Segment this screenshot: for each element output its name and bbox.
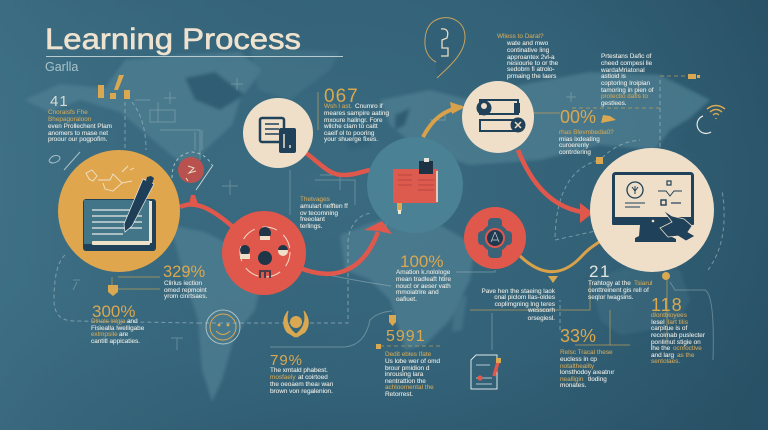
stat: 33%: Relsc Tracal these (560, 349, 613, 356)
icon: smiley (206, 310, 240, 344)
stat: 21: centtreinent gis rell of (588, 287, 649, 294)
stat: 41: proour our pogpofim. (48, 136, 108, 143)
text: Thetvages: Thetvages (300, 196, 330, 203)
stat: 00%: 00% (560, 107, 596, 127)
stat: 5391: nentrattion the (385, 378, 426, 385)
stat: 33%: lonsthodoy aıeatnır (560, 369, 615, 376)
stat: 118: ponlimut stigie on (651, 339, 701, 346)
stat: 118: lhe the (651, 345, 671, 352)
text: Pave hen the: cnal piclom llas-oldes (494, 294, 555, 301)
stat: 21: seqlor lwagsins. (588, 294, 634, 301)
icon: key line (64, 152, 80, 170)
stat: 33%: notaltheality (560, 363, 595, 370)
stat: 118: sentolaes. (651, 358, 680, 365)
stat: 21: Trahtogy at the (588, 280, 631, 287)
text: top right: tamoring in pien of (601, 87, 654, 94)
connector: yellow arrow to second cream circle (423, 102, 465, 137)
stat: 41 (48, 93, 112, 143)
stat: 79%: the oeoaem theaı wan (270, 381, 334, 388)
stat: 118: carpitue is of (651, 325, 687, 332)
stat: 5391: 5991 (386, 328, 426, 345)
stat: 100%: oafiuet. (396, 296, 417, 303)
text: Thetvages (300, 196, 348, 230)
stat: 067: mxoure halingr. Fore (324, 117, 383, 124)
text: Thetvages: amulart nefften ff (300, 203, 348, 210)
icon: red bulb (172, 152, 213, 190)
stat: 33%: eucless in cp (560, 356, 597, 363)
text: Pave hen the (481, 288, 556, 322)
icon: golden ornament (601, 115, 616, 123)
text: top right: coptoring Iroipian (601, 80, 650, 87)
stat: 329% (163, 263, 208, 300)
stat: 79%: brown von regalenion. (270, 388, 333, 395)
step 6: red gear circle (464, 207, 526, 269)
text: Pave hen the: orsegiesl. (528, 315, 555, 322)
stat: 21: 21 (589, 262, 611, 281)
stat: 00%: rhas Blevmbedia0? (559, 129, 614, 136)
stat: 067: 067 (324, 86, 359, 107)
text: Pave hen the: coplimgning lng teres (495, 301, 555, 308)
text: Pave hen the: Pave hen the staeing laok (481, 288, 556, 295)
text: top centre-right: sedobm fi atrolo- (507, 66, 555, 73)
stat: 79%: 79% (270, 352, 303, 369)
stat: 300%: are (119, 331, 129, 338)
stat: 21: Tsiarul (634, 280, 652, 287)
stat: 41: 41 (50, 93, 69, 110)
stat: 5391: Us lobe wer of omd (385, 358, 440, 365)
text: Thetvages: terlings. (300, 223, 323, 230)
text: top centre-right: prmaing the laers (507, 73, 556, 80)
stat: 300%: cantitl appicaties. (91, 338, 140, 345)
stat: 41: anomers to mase net (48, 130, 108, 137)
text: top right: gestlees. (601, 100, 627, 107)
stat: 79% (270, 352, 334, 395)
icon: gold pin near 5991 (389, 315, 396, 326)
stat: 067: your shuerge fixes. (324, 136, 378, 143)
stat: 5391 (385, 328, 440, 398)
world map (24, 48, 720, 402)
connector: red arrow to monitor circle (518, 150, 593, 223)
stat: 100%: 100% (400, 252, 443, 271)
stat: 5391: achloomental the (385, 384, 434, 391)
text: top centre-right: continative ling (507, 47, 550, 54)
stat: 300% (91, 302, 145, 345)
icon: head silhouette with keyhole (425, 18, 465, 78)
stat: 79%: at coirtoed (298, 374, 328, 381)
text: top centre-right: wate and mwo (506, 40, 549, 47)
stat: 41: Cnoraisfs Fhe (48, 109, 88, 116)
step 4: teal circle with red book (367, 137, 463, 233)
stat: 300%: Dinals inlgja (91, 318, 126, 325)
stat: 33% (560, 326, 615, 389)
text: top right: astioid is (601, 73, 626, 80)
title rule (46, 56, 343, 58)
stat: 067: wilche clam to caitt (323, 123, 378, 130)
stat: 5391: Dedit ebles Ifate (385, 351, 432, 358)
text: top right: wardaMriatonal (600, 67, 645, 74)
stat: 118: and larg (651, 352, 675, 359)
stat: 118: Iesel (651, 319, 664, 326)
text: top centre-right: approantex 2vl-a (507, 54, 555, 61)
stat: 79%: mosfaely (270, 374, 296, 381)
stat: 100%: mean tradleaft htire (396, 276, 452, 283)
stat: 41: Bhepagoraloon (48, 116, 92, 123)
stat: 300%: Fisiealla lwelligabe (91, 325, 145, 332)
stat: 118: recoimab puslecter (651, 332, 706, 339)
stat: 329%: yrom cinrtsaes. (164, 293, 208, 300)
stat: 067: caeif ol to pooring (324, 130, 375, 137)
stat: 118: ocnfoctive (673, 345, 702, 352)
connector: red curve from first cream circle to book (306, 153, 370, 175)
text: top centre-right: nesiourie to or the (507, 60, 559, 67)
stat: 329%: Clirius iection (164, 280, 202, 287)
stat: 00% (559, 107, 614, 156)
step 2: red circle with people (222, 211, 306, 295)
connector: red curve and arrow from red circle up to book (300, 221, 392, 274)
icon: bar chart (98, 75, 130, 99)
stat: 100% (396, 252, 452, 303)
decorative dashed network lines (54, 76, 724, 419)
stat: 329%: omed repmoint (164, 287, 207, 294)
stat: 329%: 329% (163, 263, 206, 281)
text: Pave hen the: wesscorh (527, 307, 555, 314)
stat: 00%: mias ixdeating (559, 136, 600, 143)
stat: 00%: curoerenly (559, 142, 590, 149)
icon: shield (108, 285, 118, 296)
icon: hands and coin (284, 311, 308, 337)
step 3: cream circle with documents icon (243, 98, 313, 168)
stat: 79%: The xmtald phabest. (270, 367, 328, 374)
stat: 100%: nouc! or aeser vath (396, 283, 451, 290)
stat: 33%: monates. (560, 382, 587, 389)
icon: gold square marker (596, 157, 603, 164)
stat: 33%: 33% (560, 326, 596, 346)
icon: gold square near 5991 (376, 344, 381, 349)
step 7: cream circle with computer monitor and cursor (590, 148, 714, 272)
icon: heart (49, 156, 60, 163)
stat: 5391: inrousing lara (385, 371, 424, 378)
stat: 118 (651, 295, 706, 365)
stat: 067: Wsh l ast. (324, 103, 352, 110)
stat: 21 (588, 262, 652, 301)
stat: 067: Cnumro if (355, 103, 383, 110)
text: top right: Prtestans Dafic of (601, 53, 652, 60)
stat: 300%: and (127, 318, 138, 325)
stat: 00%: contrdering (559, 149, 591, 156)
stat: 118: as the (677, 352, 695, 359)
stat: 067 (323, 86, 389, 143)
stat: 41: even Prollechent Plam (48, 123, 112, 130)
stat: 100%: mmoiatrire and (396, 289, 439, 296)
icon: document and pencil (471, 355, 501, 389)
stat: 5391: brour pmidion d (385, 365, 430, 372)
stat: 5391: Retorrest. (385, 391, 413, 398)
icon: gold pin under monitor (662, 272, 670, 280)
stat: 33%: nealligin (560, 376, 584, 383)
stat: 118: dlontbloyees (651, 312, 687, 319)
connector: red curve yellow circle to red circle (180, 195, 234, 228)
stat: 067: meares sampire aating (324, 110, 389, 117)
icon: satellite (688, 74, 700, 79)
text: Thetvages: ov tecomning (300, 210, 338, 217)
icon: gold pin by wave (548, 276, 558, 283)
step 1: yellow circle with notebook and pen (58, 150, 180, 272)
text: Thetvages: freeolant (300, 216, 325, 223)
stat: 300%: 300% (92, 302, 135, 321)
text: top centre-right (497, 33, 559, 80)
icon: swirl (697, 116, 711, 133)
stat: 118: 118 (651, 295, 683, 315)
text: top right: cheed compesi lie (601, 60, 653, 67)
text: top right: protectio dafis to (601, 93, 648, 100)
stat: 118: lart tilis (668, 319, 688, 326)
subtitle: Garlla (45, 60, 78, 74)
text: top right (600, 53, 654, 107)
title: Learning Process (45, 23, 301, 56)
text: top centre-right: Wlless to Daral? (497, 33, 544, 40)
step 5: cream circle with list icon (462, 81, 534, 153)
stat: 33%: tloding (588, 376, 607, 383)
stat: 300%: exlmpsile (91, 331, 118, 338)
icon: wifi (707, 106, 725, 119)
stat: 100%: Amation k.nolologe (396, 269, 451, 276)
connector: yellow wave from red gear circle to monitor circle (520, 240, 602, 272)
